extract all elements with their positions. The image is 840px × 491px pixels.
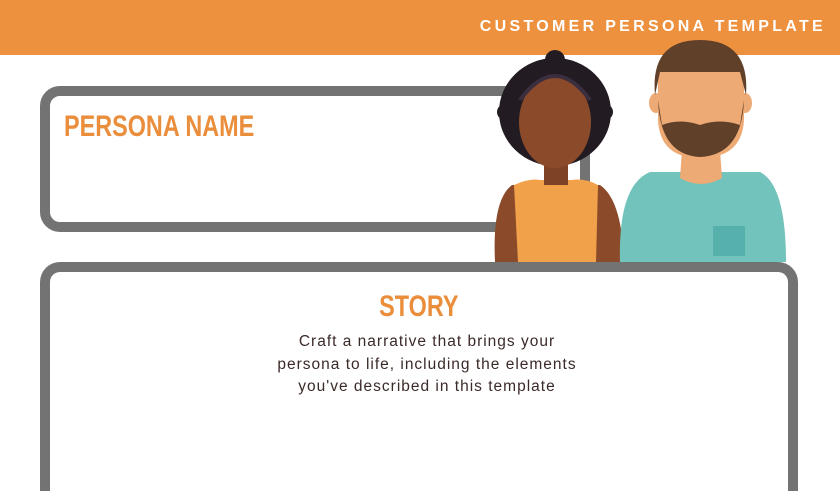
- panel: story: [40, 262, 798, 491]
- story text: persona to life, including the elements: [277, 356, 577, 372]
- panel: persona name: [40, 86, 590, 232]
- story text: [277, 333, 577, 395]
- header bar: [0, 0, 840, 55]
- man: [620, 40, 786, 262]
- heading: story: STORY: [379, 290, 459, 323]
- heading: persona name: PERSONA NAME: [64, 110, 254, 143]
- story text: you've described in this template: [298, 378, 556, 395]
- woman: [495, 50, 624, 262]
- title: CUSTOMER PERSONA TEMPLATE: [480, 18, 826, 35]
- story text: Craft a narrative that brings your: [299, 333, 555, 350]
- illustration: two personas: [494, 40, 786, 262]
